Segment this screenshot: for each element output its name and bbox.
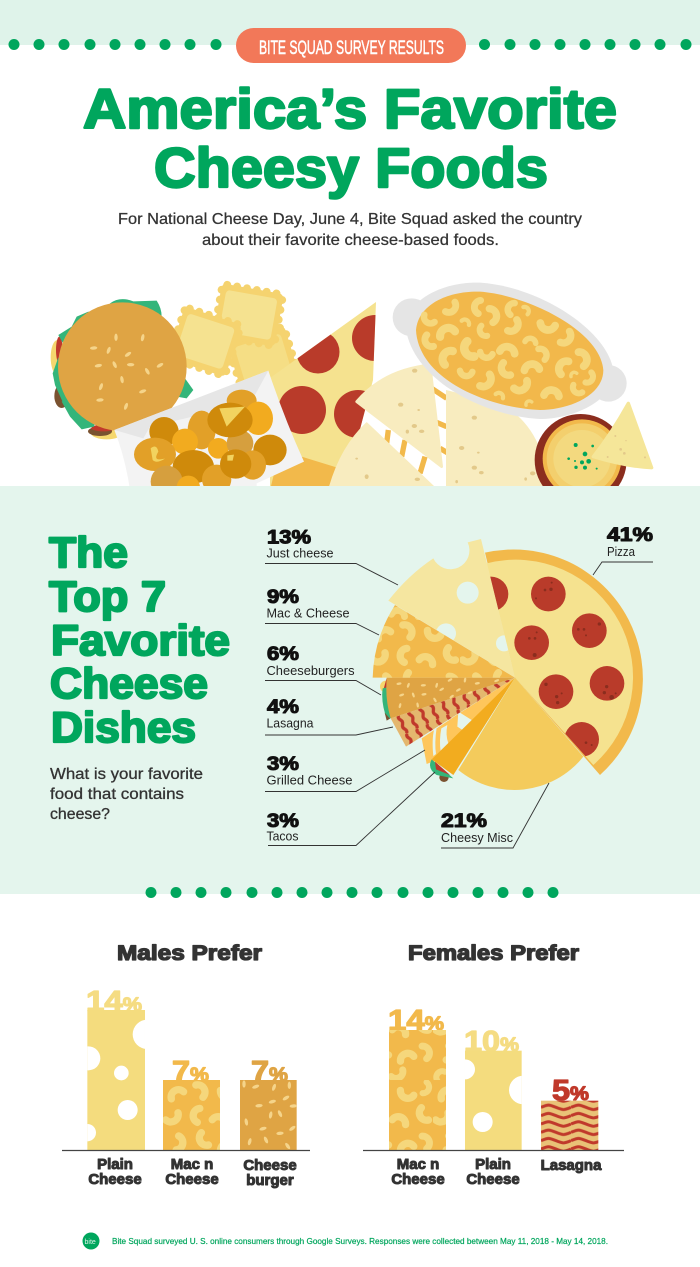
callout: 4% lasagna: Lasagna — [266, 716, 314, 730]
bar labels: females: Cheese — [391, 1171, 445, 1188]
dots: top right — [479, 39, 692, 50]
callout: 9% mac and cheese: Mac & Cheese — [266, 606, 350, 620]
bar chart: females prefer — [363, 1005, 624, 1188]
axis — [363, 1150, 624, 1152]
text block: survey question: What is your favorite — [50, 766, 203, 783]
text block: survey question — [50, 766, 203, 823]
callout: 3% grilled cheese: Grilled Cheese — [266, 774, 353, 788]
callout: 21% cheesy misc — [441, 783, 549, 848]
heading: the top 7 favorite cheese dishes — [49, 529, 230, 752]
bar labels: males: Cheese — [88, 1171, 142, 1188]
heading: the top 7 favorite cheese dishes: The — [49, 529, 128, 577]
bar: plain cheese 14%: 14% — [86, 986, 142, 1018]
callout: 13% just cheese: Just cheese — [266, 546, 334, 560]
slice: cheeseburger 6% — [380, 677, 515, 721]
icon: cheeseburger — [51, 299, 193, 439]
bar labels: females: Cheese — [466, 1171, 520, 1188]
callout: 21% cheesy misc: 21% — [441, 811, 487, 832]
bar labels: males: Cheese — [243, 1157, 297, 1174]
chart: pie of favorite cheese dishes — [373, 539, 643, 790]
bar labels: males: Plain — [97, 1156, 133, 1173]
callout: 21% cheesy misc: Cheesy Misc — [441, 831, 513, 845]
text block: survey question: food that contains — [50, 786, 184, 803]
icon: bite squad logo: bite — [84, 1239, 96, 1246]
callout: 9% mac and cheese — [265, 587, 379, 635]
badge: survey results: BITE SQUAD SURVEY RESULTS — [259, 38, 444, 59]
callout: 13% just cheese — [265, 528, 398, 585]
slice: just cheese 13% — [388, 539, 515, 678]
callout: 41% pizza: Pizza — [607, 545, 635, 559]
intro text: about their favorite cheese-based foods. — [202, 232, 499, 249]
bar: plain cheese 10% — [465, 1030, 522, 1150]
heading: the top 7 favorite cheese dishes: Dishes — [51, 704, 196, 752]
axis — [62, 1150, 310, 1152]
chip: bottom left — [330, 423, 433, 487]
chip: left — [357, 365, 442, 467]
callout: 3% tacos — [266, 772, 435, 846]
slice: mac and cheese 9% — [373, 605, 515, 678]
chip: center — [446, 390, 548, 487]
heading: the top 7 favorite cheese dishes: Favorite — [51, 617, 230, 665]
bar: lasagna 5%: 5% — [552, 1075, 589, 1107]
heading: males prefer: Males Prefer — [117, 942, 262, 965]
bar: mac n cheese 14%: 14% — [388, 1005, 444, 1037]
badge: survey results — [236, 28, 466, 63]
title — [83, 77, 617, 199]
icon: ravioli — [168, 283, 300, 394]
bar: plain cheese 14% — [87, 990, 145, 1150]
callout: 3% tacos: 3% — [267, 811, 299, 832]
title: Cheesy Foods — [154, 136, 548, 199]
bar: mac n cheese 7%: 7% — [172, 1056, 209, 1088]
callout: 3% grilled cheese: 3% — [267, 754, 299, 775]
icon: pizza slice — [270, 302, 376, 486]
callout: 3% tacos: Tacos — [266, 830, 298, 844]
callout: 6% cheeseburgers: 6% — [267, 644, 299, 665]
intro text — [118, 211, 582, 249]
panel: top 7 band — [0, 486, 700, 894]
bar labels: males: burger — [246, 1172, 294, 1189]
bar labels: males — [88, 1156, 297, 1189]
heading: females prefer: Females Prefer — [408, 942, 579, 965]
bar: cheeseburger 7%: 7% — [251, 1056, 288, 1088]
illustration: hero food spread — [0, 283, 700, 1250]
icon: tortilla chips, mac dish and dip — [330, 283, 652, 506]
icon: basket of cheese curds — [114, 371, 304, 499]
bar chart: males prefer — [62, 986, 310, 1189]
footer note: Bite Squad surveyed U. S. online consumers through Google Surveys. Responses were collected between May 11, 2018 - May 14, 2018. — [112, 1237, 608, 1246]
bar labels: females: Lasagna — [541, 1157, 602, 1174]
slice: cheesy misc 21% — [458, 678, 583, 790]
callout: 3% grilled cheese — [265, 750, 425, 792]
dots: top left — [8, 39, 222, 50]
bar labels: males: Mac n — [171, 1156, 213, 1173]
callout: 41% pizza: 41% — [607, 525, 653, 546]
bar: mac n cheese 14% — [388, 1005, 446, 1150]
title: America’s Favorite — [83, 77, 617, 140]
dots: section divider — [146, 887, 558, 898]
intro text: For National Cheese Day, June 4, Bite Squad asked the country — [118, 211, 582, 228]
bar: mac n cheese 7% — [163, 1056, 220, 1150]
callout: 4% lasagna: 4% — [267, 697, 299, 718]
callout: 6% cheeseburgers: Cheeseburgers — [266, 664, 354, 678]
slice: pizza 41% — [474, 549, 643, 775]
bar labels: females: Mac n — [397, 1156, 439, 1173]
icon: mac and cheese dish — [393, 283, 627, 419]
bar: plain cheese 10%: 10% — [464, 1026, 519, 1058]
background: top band — [0, 0, 700, 45]
heading: the top 7 favorite cheese dishes: Cheese — [50, 660, 208, 708]
bar labels: females — [391, 1156, 602, 1188]
text block: survey question: cheese? — [50, 806, 110, 823]
slice: grilled cheese 3% — [422, 678, 515, 764]
bar labels: males: Cheese — [165, 1171, 219, 1188]
callout: 4% lasagna — [265, 697, 393, 735]
bar: cheeseburger 7% — [240, 1056, 297, 1150]
callout: 9% mac and cheese: 9% — [267, 587, 299, 608]
slice: lasagna 4% — [391, 678, 515, 747]
callout: 41% pizza — [593, 525, 653, 575]
callout: 13% just cheese: 13% — [267, 528, 311, 548]
bar labels: females: Plain — [475, 1156, 511, 1173]
slice: tacos 3% — [430, 678, 515, 782]
icon: bite squad logo — [82, 1232, 100, 1250]
bar: lasagna 5% — [541, 1075, 598, 1150]
heading: the top 7 favorite cheese dishes: Top 7 — [49, 573, 166, 621]
icon: cheese dip — [535, 403, 652, 506]
callout: 6% cheeseburgers — [265, 644, 381, 695]
